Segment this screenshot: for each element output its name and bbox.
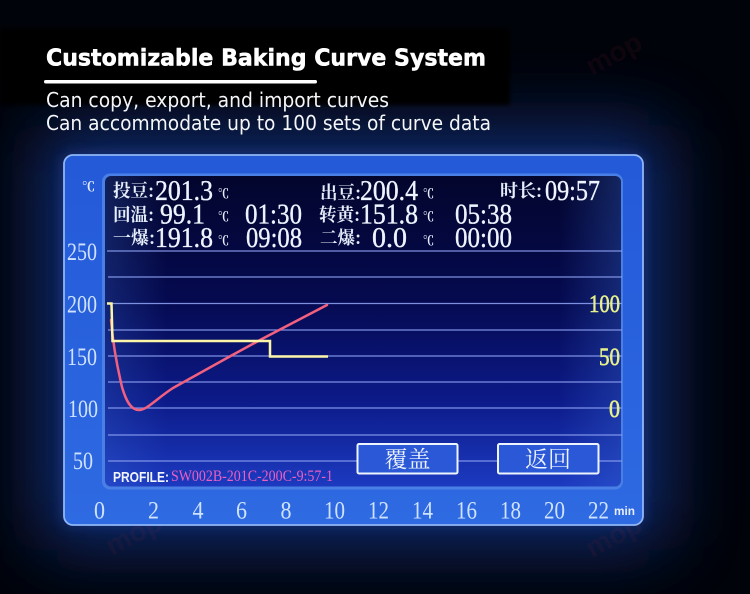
subtitle text — [46, 88, 491, 135]
readout row 3: 191.8 — [155, 223, 213, 254]
readout row 1: ℃ — [218, 186, 229, 201]
button: back: 返回 — [525, 447, 571, 472]
left y axis labels: 150 — [67, 344, 97, 371]
right y axis labels: 50 — [599, 344, 620, 371]
title: Customizable Baking Curve System — [46, 44, 486, 72]
x axis labels: 12 — [368, 498, 389, 524]
chart: power line — [107, 304, 328, 356]
readout row 2: 01:30 — [245, 200, 302, 230]
chart: temperature curve — [111, 305, 327, 410]
profile label — [113, 468, 333, 486]
readout row 3: 09:08 — [246, 223, 302, 254]
right y axis labels — [589, 291, 620, 423]
screen plot area — [102, 174, 623, 490]
left y axis labels: 100 — [68, 396, 98, 423]
readout row 2: 05:38 — [455, 200, 512, 230]
panel glow — [35, 125, 671, 550]
x axis labels: 20 — [544, 498, 565, 524]
readout row 3: 0.0 — [372, 223, 407, 254]
readout row 1: 投豆: — [113, 177, 154, 203]
grid lines — [107, 251, 622, 461]
x axis labels: 18 — [500, 498, 521, 524]
right y axis labels: 0 — [609, 396, 620, 423]
readout row 1: 201.3 — [155, 176, 213, 207]
watermarks — [100, 26, 647, 563]
x axis labels: 8 — [280, 498, 292, 524]
readout row 1: ℃ — [423, 186, 434, 201]
subtitle text: Can copy, export, and import curves — [46, 88, 389, 112]
left y axis labels: 50 — [73, 448, 93, 475]
readout row 2: 151.8 — [360, 200, 418, 230]
left y axis labels: 200 — [67, 292, 97, 318]
x axis unit: min — [614, 506, 635, 518]
readout row 2 — [113, 200, 512, 230]
x axis labels: 16 — [456, 498, 477, 524]
subtitle text: Can accommodate up to 100 sets of curve data — [46, 111, 491, 135]
panel: touchscreen display — [64, 155, 643, 525]
profile label: SW002B-201C-200C-9:57-1 — [171, 468, 333, 485]
panel frame — [64, 155, 643, 525]
x axis labels — [94, 498, 609, 524]
title underline — [44, 80, 317, 84]
readout row 1: 09:57 — [545, 176, 600, 207]
button: overwrite — [358, 444, 458, 474]
readout row 2: 99.1 — [160, 200, 205, 230]
profile label: PROFILE: — [113, 469, 169, 486]
x axis labels: 4 — [192, 498, 204, 524]
readout row 3: 二爆: — [320, 224, 361, 250]
readout row 3: 一爆: — [113, 224, 155, 250]
readout row 3: ℃ — [423, 233, 434, 248]
x axis labels: 14 — [412, 498, 433, 524]
x axis labels: 6 — [236, 498, 247, 524]
readout row 3 — [113, 223, 512, 254]
readout row 2: ℃ — [423, 209, 434, 224]
header backdrop — [0, 28, 510, 105]
readout row 3: 00:00 — [455, 223, 512, 254]
button: back — [498, 444, 598, 474]
readout row 1: 出豆: — [320, 179, 361, 205]
readout row 1 — [113, 176, 600, 207]
watermarks: mop — [580, 26, 647, 81]
readout row 3: ℃ — [218, 233, 229, 248]
readout row 2: 回温: — [113, 201, 154, 227]
readout row 2: ℃ — [218, 209, 229, 224]
readout row 1: 200.4 — [360, 176, 418, 207]
x axis labels: 10 — [324, 498, 345, 524]
left y axis labels — [67, 239, 98, 475]
button: overwrite: 覆盖 — [384, 447, 430, 472]
left y axis labels: 250 — [67, 239, 97, 266]
watermarks: mop — [580, 508, 647, 563]
x axis labels: 22 — [588, 498, 609, 524]
right y axis labels: 100 — [589, 291, 620, 318]
readout row 2: 转黄: — [319, 201, 360, 227]
x axis labels: 2 — [148, 498, 159, 524]
readout row 1: 时长: — [500, 177, 542, 203]
x axis labels: 0 — [94, 498, 105, 524]
watermarks: mop — [100, 506, 167, 561]
y axis unit: ℃ — [82, 179, 95, 194]
